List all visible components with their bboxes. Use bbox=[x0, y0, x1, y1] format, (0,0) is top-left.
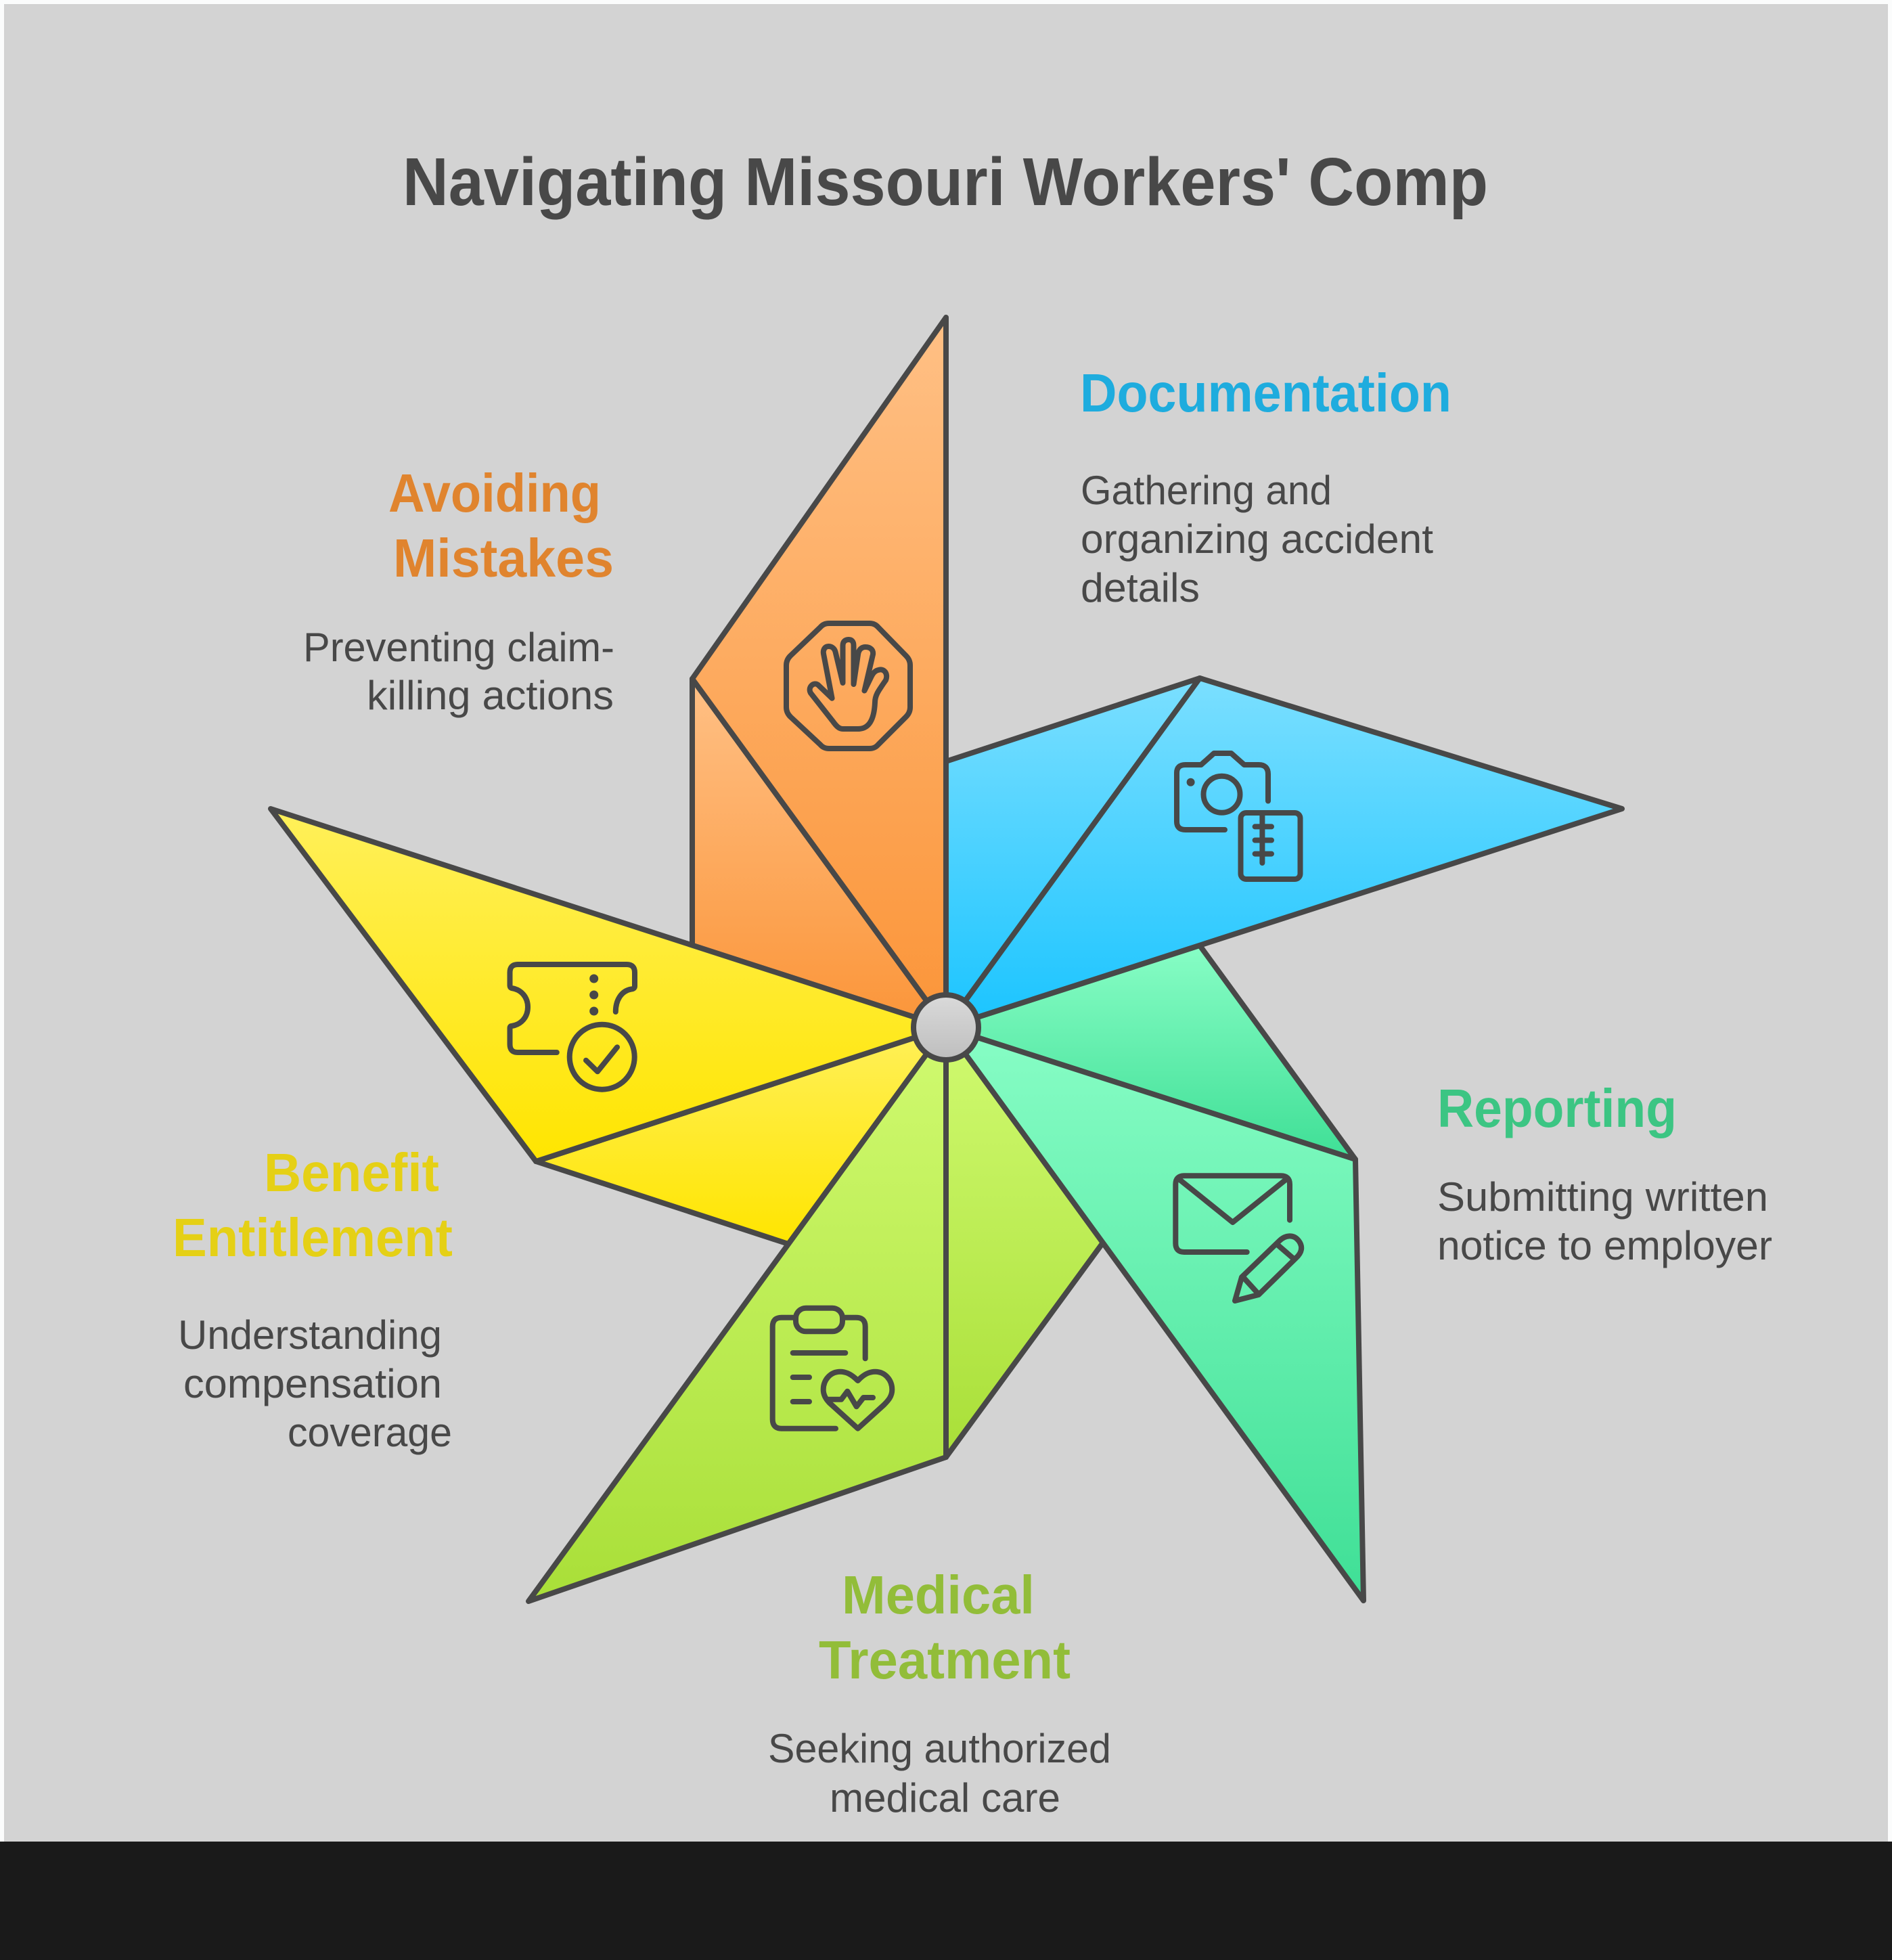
title: Navigating Missouri Workers' Comp bbox=[403, 144, 1488, 220]
description: benefit entitlement: Understanding bbox=[178, 1312, 442, 1358]
description: reporting: notice to employer bbox=[1437, 1223, 1772, 1268]
description: documentation: organizing accident bbox=[1081, 516, 1433, 562]
heading: benefit entitlement: Benefit bbox=[264, 1142, 439, 1203]
heading: reporting: Reporting bbox=[1437, 1078, 1677, 1138]
label: reporting bbox=[1437, 1078, 1780, 1268]
description: medical treatment: medical care bbox=[830, 1775, 1060, 1821]
heading: benefit entitlement: Entitlement bbox=[173, 1207, 453, 1268]
blade: documentation secondary bbox=[946, 678, 1200, 1027]
icon: ticket with check bbox=[510, 964, 635, 1090]
heading: avoiding mistakes: Mistakes bbox=[393, 528, 614, 588]
blade: avoiding mistakes secondary bbox=[692, 679, 946, 1027]
pinwheel chart bbox=[271, 317, 1622, 1601]
blade: benefit entitlement main bbox=[271, 809, 946, 1161]
blade: benefit entitlement secondary bbox=[536, 1027, 946, 1244]
label: benefit entitlement bbox=[173, 1142, 454, 1455]
footer band bbox=[0, 1842, 1892, 1960]
description: documentation: details bbox=[1081, 565, 1200, 610]
description: benefit entitlement: compensation bbox=[183, 1361, 442, 1406]
blade: reporting main bbox=[946, 1027, 1364, 1601]
heading: medical treatment: Medical bbox=[842, 1565, 1035, 1625]
blade: documentation main bbox=[946, 678, 1622, 1027]
heading: avoiding mistakes: Avoiding bbox=[388, 463, 601, 523]
heading: documentation: Documentation bbox=[1080, 363, 1451, 423]
description: medical treatment: Seeking authorized bbox=[768, 1726, 1111, 1771]
hub circle bbox=[914, 995, 978, 1060]
blade: medical treatment main bbox=[528, 1027, 946, 1601]
description: reporting: Submitting written bbox=[1437, 1174, 1768, 1220]
description: avoiding mistakes: killing actions bbox=[367, 673, 614, 718]
blade: avoiding mistakes main bbox=[692, 317, 946, 1027]
icon: envelope and pencil bbox=[1175, 1176, 1301, 1301]
description: documentation: Gathering and bbox=[1081, 468, 1332, 513]
blade: reporting secondary bbox=[946, 945, 1355, 1159]
icon: camera and notebook bbox=[1177, 753, 1301, 879]
label: medical treatment bbox=[768, 1565, 1123, 1821]
icon: stop hand bbox=[786, 623, 910, 749]
label: avoiding mistakes bbox=[303, 463, 626, 718]
label: documentation bbox=[1080, 363, 1451, 610]
icon: clipboard with heart bbox=[773, 1308, 892, 1429]
blade: medical treatment secondary bbox=[946, 1027, 1103, 1457]
description: benefit entitlement: coverage bbox=[288, 1410, 452, 1455]
heading: medical treatment: Treatment bbox=[819, 1630, 1071, 1690]
description: avoiding mistakes: Preventing claim- bbox=[303, 625, 614, 670]
